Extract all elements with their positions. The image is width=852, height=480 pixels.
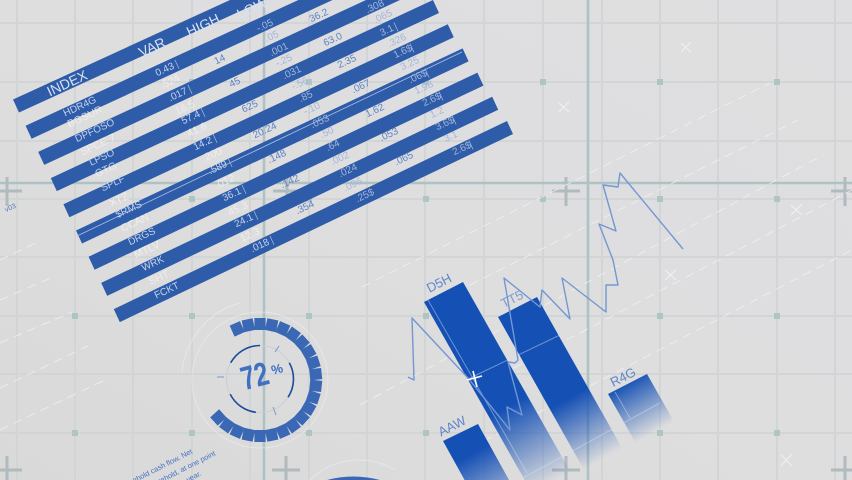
donut gauge 72% — [182, 303, 328, 448]
gauge inner arcs — [230, 346, 293, 412]
row values on blue bars: 24.1 — [233, 212, 256, 230]
faded columns: -.05 — [255, 17, 276, 35]
high column values: 1.62 — [364, 102, 387, 120]
row values in light gaps: SHT — [147, 268, 172, 288]
sparkle marks — [559, 42, 802, 466]
faded columns — [255, 0, 474, 205]
faded columns: .001 — [268, 41, 291, 59]
plus markers — [0, 177, 852, 480]
second gauge, cropped — [310, 460, 395, 480]
table bars — [13, 0, 513, 322]
row values on blue bars: .589 — [207, 159, 230, 177]
cell separator ticks — [175, 22, 473, 245]
high column values: 14 — [213, 52, 228, 67]
high column values: .354 — [294, 199, 317, 217]
row values on blue bars: DRGS — [127, 226, 158, 248]
data table — [13, 0, 513, 322]
high column values: 2.35 — [336, 53, 359, 71]
faded columns: 1.2 — [428, 105, 446, 121]
white dashed diagonals — [0, 83, 852, 448]
bar AAW — [443, 424, 509, 480]
table header: VAR — [136, 34, 168, 60]
bar labels: D5H — [424, 270, 454, 296]
row values on blue bars — [62, 61, 272, 302]
faded columns: 3.6$ — [434, 115, 457, 133]
faded columns: 2.6$ — [451, 140, 474, 158]
small version label: v03 — [4, 203, 17, 214]
gauge segments — [210, 318, 322, 442]
faded columns: .25$ — [354, 187, 377, 205]
faded columns: .002 — [329, 150, 352, 168]
high column values: .053 — [378, 126, 401, 144]
faded columns: 2.6$ — [421, 91, 444, 109]
line chart — [408, 173, 683, 430]
faded columns: 3.25 — [399, 55, 422, 73]
high column values — [213, 7, 416, 217]
faded columns: 3.1 — [378, 23, 396, 39]
row values in light gaps: .200 — [200, 145, 224, 165]
bar labels: AAW — [436, 412, 469, 439]
highlight line across row — [77, 52, 462, 236]
row values on blue bars: 14.2 — [192, 135, 215, 153]
sparkle on chart — [467, 371, 482, 387]
faded columns: .05 — [263, 29, 281, 45]
row values on blue bars: FCKT — [153, 280, 181, 302]
row values in light gaps: CCAN — [119, 211, 151, 235]
bar TT5 — [498, 297, 640, 480]
row values in light gaps: 16.5 — [173, 98, 197, 118]
row values on blue bars: SPLF — [99, 174, 127, 194]
row values in light gaps — [66, 72, 262, 288]
row values in light gaps: MTLV — [132, 239, 162, 261]
faded columns: .50 — [318, 125, 336, 141]
row values in light gaps: 12.3 — [238, 225, 262, 245]
high column values: .142 — [279, 173, 302, 191]
row values on blue bars: WRK — [140, 254, 166, 274]
bar labels: TT5 — [498, 287, 526, 311]
bar chart — [424, 270, 690, 480]
row values on blue bars: HDR4G — [62, 95, 98, 119]
row values in light gaps: GTG — [93, 160, 119, 180]
faded columns: .85 — [297, 89, 315, 105]
gauge value: 72 — [237, 356, 273, 398]
high column values: 20.24 — [251, 121, 279, 141]
table header — [44, 0, 271, 99]
bar labels — [424, 270, 638, 439]
high column values: 625 — [240, 98, 260, 116]
row values in light gaps: .524 — [158, 72, 182, 92]
row values on blue bars: .018 — [249, 237, 272, 255]
row values on blue bars: LPSO — [88, 147, 117, 169]
second gauge ring — [310, 460, 395, 480]
grid node squares — [72, 79, 780, 436]
gauge percent sign: % — [269, 360, 285, 378]
faded columns: .096 — [342, 176, 365, 194]
faded columns: .031 — [281, 64, 304, 82]
high column values: .148 — [266, 148, 289, 166]
high column values: .065 — [393, 150, 416, 168]
faded columns: 3.1 — [442, 129, 460, 145]
faded columns: .065 — [372, 8, 395, 26]
high column values: 63.0 — [322, 31, 345, 49]
row values in light gaps: .012 — [213, 172, 237, 192]
table header: INDEX — [44, 66, 90, 99]
row values in light gaps: 41.6 — [185, 120, 209, 140]
row values on blue bars: $RMS — [114, 199, 144, 221]
high column values: .067 — [350, 78, 373, 96]
gauge guide rings — [182, 303, 328, 448]
row values on blue bars: 0.43 — [154, 61, 177, 79]
bar overlay lines — [428, 300, 660, 478]
high column values: 36.2 — [308, 7, 331, 25]
faded columns: -.25 — [274, 52, 295, 70]
second gauge segments — [327, 476, 380, 480]
row values in light gaps: XTZ — [107, 190, 131, 210]
row values in light gaps: SPCE 7 — [79, 132, 118, 158]
row values on blue bars: 57.4 — [180, 109, 203, 127]
gauge ticks — [217, 346, 279, 415]
faded columns: -.10 — [302, 100, 323, 118]
faded columns: .06$ — [407, 68, 430, 86]
bar labels: R4G — [608, 364, 638, 390]
table header: HIGH — [184, 10, 222, 40]
row values on blue bars: 36.1 — [221, 186, 244, 204]
faded columns: .024 — [337, 162, 360, 180]
high column values: 45 — [228, 75, 243, 90]
faded columns: 1.6$ — [392, 43, 415, 61]
faded columns: .326 — [386, 32, 409, 50]
row values in light gaps: BGSUR — [66, 103, 105, 130]
faded columns: .053 — [309, 113, 332, 131]
row values in light gaps: 45.3 — [226, 199, 250, 219]
faded columns: .64 — [324, 138, 342, 154]
bar R4G — [608, 374, 690, 470]
bar D5H — [424, 282, 575, 480]
row values on blue bars: .017 — [167, 86, 190, 104]
faded columns: 1.98 — [413, 79, 436, 97]
faded columns: -.56 — [290, 75, 311, 93]
row values on blue bars: DPFOSO — [74, 117, 117, 145]
